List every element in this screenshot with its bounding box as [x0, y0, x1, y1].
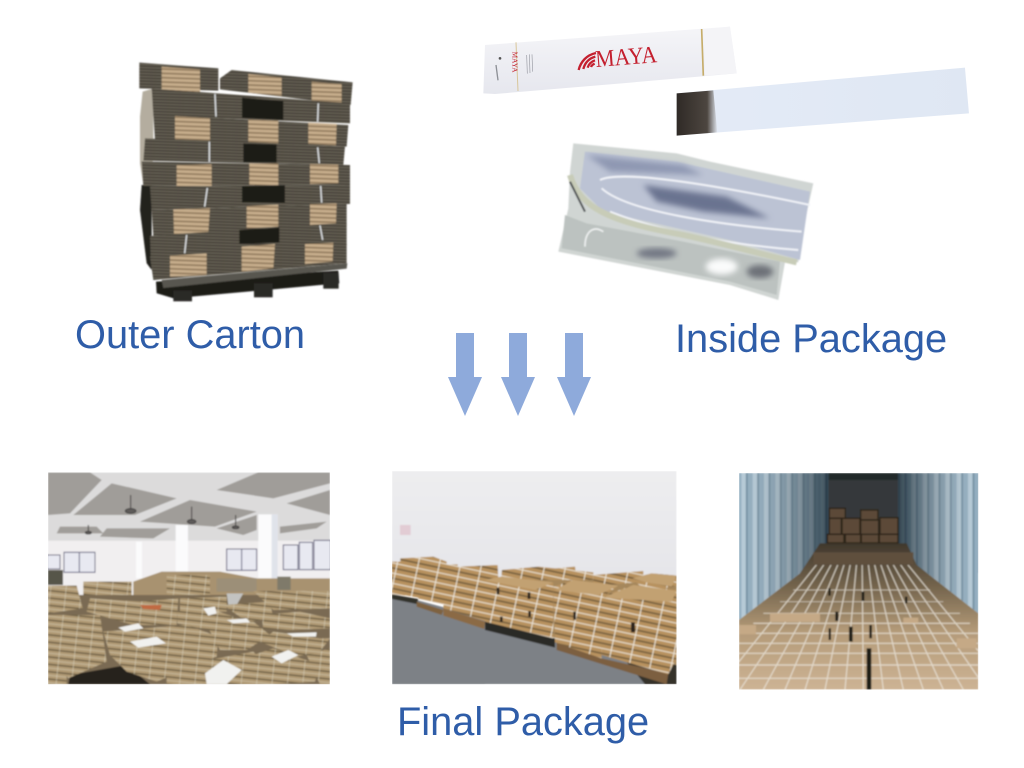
right corrugated wall [898, 473, 978, 613]
strap lines radiating [739, 564, 978, 690]
dark gaps [828, 588, 907, 690]
photo: final package pallets against wall [392, 471, 677, 684]
stacked boxes at back [827, 508, 898, 543]
heading: Final Package: Final Package [397, 700, 649, 744]
windows [47, 540, 331, 572]
back pallets [392, 557, 643, 621]
shadow at back of stacks [534, 578, 677, 666]
box tops [484, 573, 677, 602]
pillars [136, 514, 272, 578]
dark centre [643, 185, 770, 218]
pallet bases [392, 594, 668, 684]
arrow: down centre [501, 333, 535, 416]
arrow: down right [557, 333, 591, 416]
pale left edge of carton stack [140, 88, 153, 185]
upper blister body [580, 152, 810, 260]
gold tape stripes [702, 29, 703, 76]
pallet stacks [48, 586, 330, 684]
hand holes [239, 98, 285, 244]
white papers on stacks [118, 607, 317, 684]
photo: inside package white MAYA box [483, 27, 737, 94]
floor of boxes [739, 543, 978, 690]
wall [392, 471, 677, 584]
photo: container loaded with boxes [739, 473, 978, 690]
logo mark [579, 53, 596, 70]
distant stacks [132, 570, 330, 596]
dark gaps between boxes [497, 588, 635, 632]
MAYA logo: MAYA [594, 42, 659, 73]
pallet [156, 263, 347, 301]
box body [483, 27, 737, 94]
ceiling fans [85, 495, 239, 534]
sticker on wall [400, 525, 411, 535]
side print: MAYA [511, 52, 520, 73]
highlights [600, 177, 810, 250]
floor [484, 629, 676, 684]
wrap edge [570, 175, 797, 262]
heading: Outer Carton: Outer Carton [75, 313, 305, 357]
white straps [185, 94, 323, 253]
heading: Inside Package: Inside Package [675, 317, 947, 361]
left corrugated wall [739, 473, 828, 620]
photo: inside package clear blister [558, 143, 813, 300]
photo: warehouse full of pallets [47, 472, 331, 684]
walls and ceiling [48, 540, 330, 596]
front pallets [484, 573, 677, 674]
container back wall [827, 473, 978, 572]
mid steps [813, 552, 913, 564]
dark lower left edge [140, 185, 152, 270]
floor [48, 595, 330, 684]
tan carton edges [162, 67, 342, 277]
carton rows [139, 63, 353, 280]
lower blister [562, 215, 780, 295]
arrow: down left [448, 333, 482, 416]
box flap [704, 27, 737, 76]
photo: stack of flat outer cartons on pallet [139, 63, 353, 301]
raised light boxes [739, 613, 977, 648]
photo: inside package plastic sleeve [677, 68, 969, 136]
tiny side text [496, 54, 533, 80]
